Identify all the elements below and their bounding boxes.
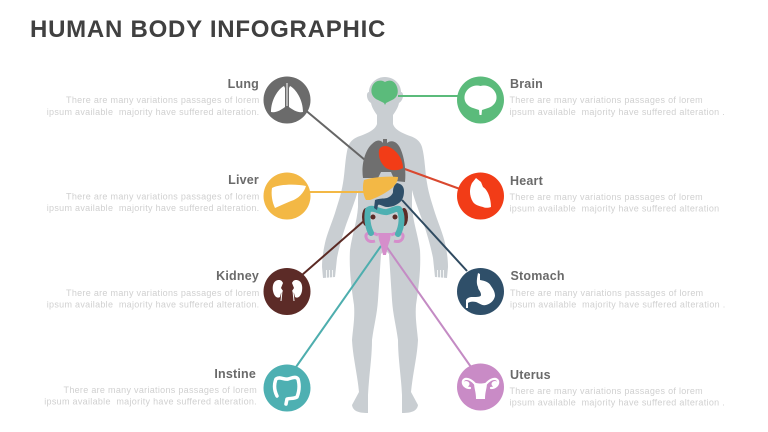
heart description: There are many variations passages of lorem: [510, 192, 703, 202]
icon: brain: [457, 76, 504, 124]
instine description: There are many variations passages of lorem: [64, 385, 257, 395]
organ: intestine: [367, 209, 402, 234]
item: kidney: [47, 268, 310, 315]
brain description: ipsum available majority have suffered alteration .: [510, 107, 725, 117]
liver description: ipsum available majority have suffered alteration.: [47, 203, 260, 213]
organ: kidneys: [362, 208, 408, 226]
icon: stomach: [457, 268, 504, 315]
kidney description: There are many variations passages of lorem: [66, 288, 260, 298]
heart heading: Heart: [510, 174, 544, 188]
kidney description: ipsum available majority have suffered alteration.: [47, 300, 260, 310]
lung heading: Lung: [228, 77, 259, 91]
icon: heart: [457, 172, 504, 220]
icon: liver: [264, 172, 310, 220]
item: brain: [457, 76, 725, 124]
instine heading: Instine: [214, 367, 256, 381]
item: liver: [47, 172, 310, 220]
lung description: There are many variations passages of lorem: [66, 95, 260, 105]
item: lung: [47, 76, 310, 124]
item: heart: [457, 172, 719, 220]
organ: liver: [363, 177, 398, 200]
kidney heading: Kidney: [216, 269, 259, 283]
brain description: There are many variations passages of lorem: [510, 95, 703, 105]
liver description: There are many variations passages of lorem: [66, 192, 260, 202]
icon: kidneys: [264, 268, 310, 315]
organ: brain: [371, 81, 398, 105]
uterus description: There are many variations passages of lorem: [510, 386, 703, 396]
title: HUMAN BODY INFOGRAPHIC: [30, 16, 386, 43]
brain heading: Brain: [510, 77, 543, 91]
instine description: ipsum available majority have suffered alteration.: [44, 396, 257, 406]
organ: uterus: [366, 233, 403, 255]
heart description: ipsum available majority have suffered alteration: [510, 204, 719, 214]
uterus description: ipsum available majority have suffered alteration .: [510, 398, 725, 408]
item: stomach: [457, 268, 726, 315]
stomach description: There are many variations passages of lorem: [510, 288, 703, 298]
stomach heading: Stomach: [510, 269, 565, 283]
item: instine: [44, 364, 310, 412]
connector lines: [296, 96, 471, 367]
lung description: ipsum available majority have suffered alteration.: [47, 107, 260, 117]
icon: uterus: [457, 364, 504, 410]
organ: stomach: [374, 183, 404, 210]
stomach description: ipsum available majority have suffered alteration .: [510, 300, 726, 310]
organ: lungs: [362, 139, 405, 182]
organ: heart: [379, 146, 403, 170]
liver heading: Liver: [228, 173, 259, 187]
icon: lungs: [264, 76, 310, 124]
human body silhouette: [322, 77, 448, 413]
uterus heading: Uterus: [510, 368, 551, 382]
item: uterus: [457, 364, 725, 410]
icon: intestine: [264, 364, 310, 412]
